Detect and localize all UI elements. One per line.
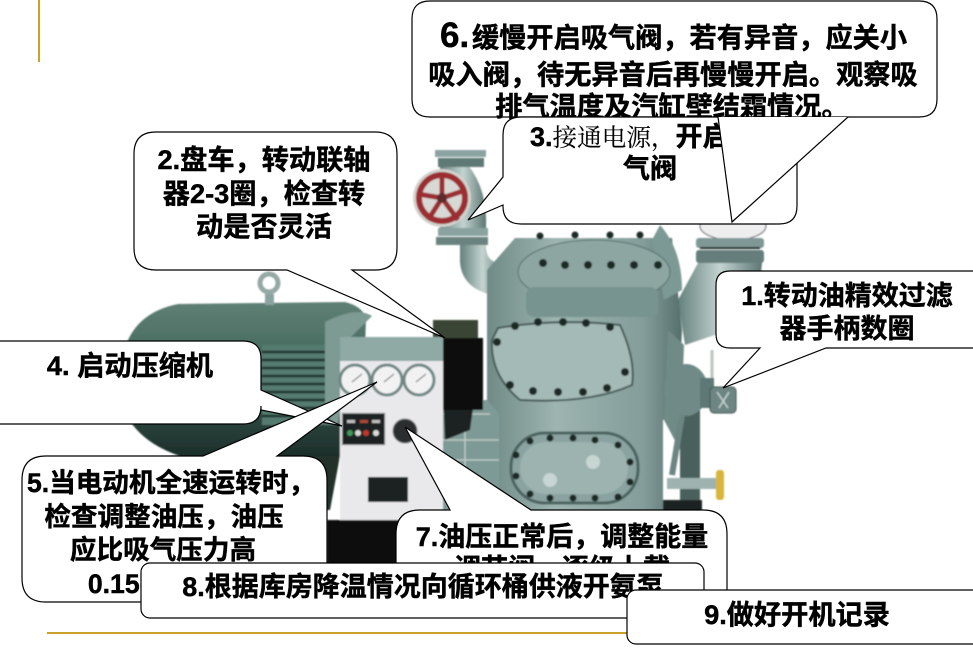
callout 1 text: 1.转动油精效过滤: [741, 281, 953, 311]
motor: [120, 274, 372, 510]
callout 1: oil filter handle: [716, 271, 973, 388]
rotary knob: [393, 419, 417, 443]
callout 6: suction valve opening: [412, 1, 937, 122]
gold vertical accent line: [38, 0, 40, 62]
callout 4: start compressor: [0, 341, 342, 426]
callout 6 pointer to gauge: [718, 117, 848, 222]
compressor unit photo: [120, 150, 766, 590]
callout 6: suction valve opening: 吸入阀，待无异音后再慢慢开启。观察吸: [428, 59, 918, 90]
cover bolts: [493, 232, 662, 502]
discharge valve and gauge: [696, 212, 766, 263]
lower oval cover: [511, 433, 638, 503]
callout 2: turn coupling: 器2-3圈，检查转: [163, 178, 365, 209]
callout 2: turn coupling: [134, 132, 445, 338]
middle inspection cover: [492, 322, 633, 401]
callout 6: suction valve opening: 排气温度及汽缸壁结霜情况。: [495, 91, 849, 122]
nameplate: [368, 477, 408, 502]
gold horizontal footer line: [47, 632, 927, 634]
callout 1: oil filter handle: 器手柄数圈: [780, 314, 914, 344]
callout 8: ammonia pump: [141, 563, 704, 618]
callout 3: power on: 气阀: [623, 154, 677, 184]
callout 7 text: 7.油压正常后，调整能量: [416, 522, 708, 552]
callout 6 text: 缓慢开启吸气阀，若有异音，应关小: [472, 22, 907, 53]
control panel: [327, 320, 483, 570]
pressure gauges: [340, 365, 434, 395]
compressor body: [460, 225, 762, 590]
piping behind panel: [443, 395, 503, 515]
red suction valve: [413, 150, 488, 245]
callout 5: check oil pressure: 应比吸气压力高: [70, 535, 256, 565]
switch box: [342, 413, 385, 445]
callout 6 text: 6.: [440, 16, 469, 55]
callout 9 text: 9.做好开机记录: [704, 599, 890, 630]
callout 4 text: 4. 启动压缩机: [47, 350, 213, 381]
callout 7: adjust capacity valve: 调节阀，逐级上载: [454, 554, 670, 584]
callout 9: record: [627, 590, 973, 644]
side oil pump: [664, 330, 736, 475]
callout 3 text: 3.接通电源，开启吸排: [530, 115, 784, 154]
callout 5: check oil pressure: 检查调整油压，油压: [44, 502, 284, 532]
callout 5: check oil pressure: [22, 382, 377, 602]
callout 7: adjust capacity valve: [396, 427, 727, 610]
drain valve: [667, 470, 724, 500]
callout 5: check oil pressure: 0.15-0.3MPa: [88, 569, 240, 599]
callout 5 text: 5.当电动机全速运转时，: [27, 468, 315, 498]
callout 2 text: 2.盘车，转动联轴: [158, 144, 370, 175]
callout 2: turn coupling: 动是否灵活: [196, 211, 332, 242]
callout 8 text: 8.根据库房降温情况向循环桶供液开氨泵: [182, 572, 664, 602]
callout 3: power on: [468, 115, 797, 224]
